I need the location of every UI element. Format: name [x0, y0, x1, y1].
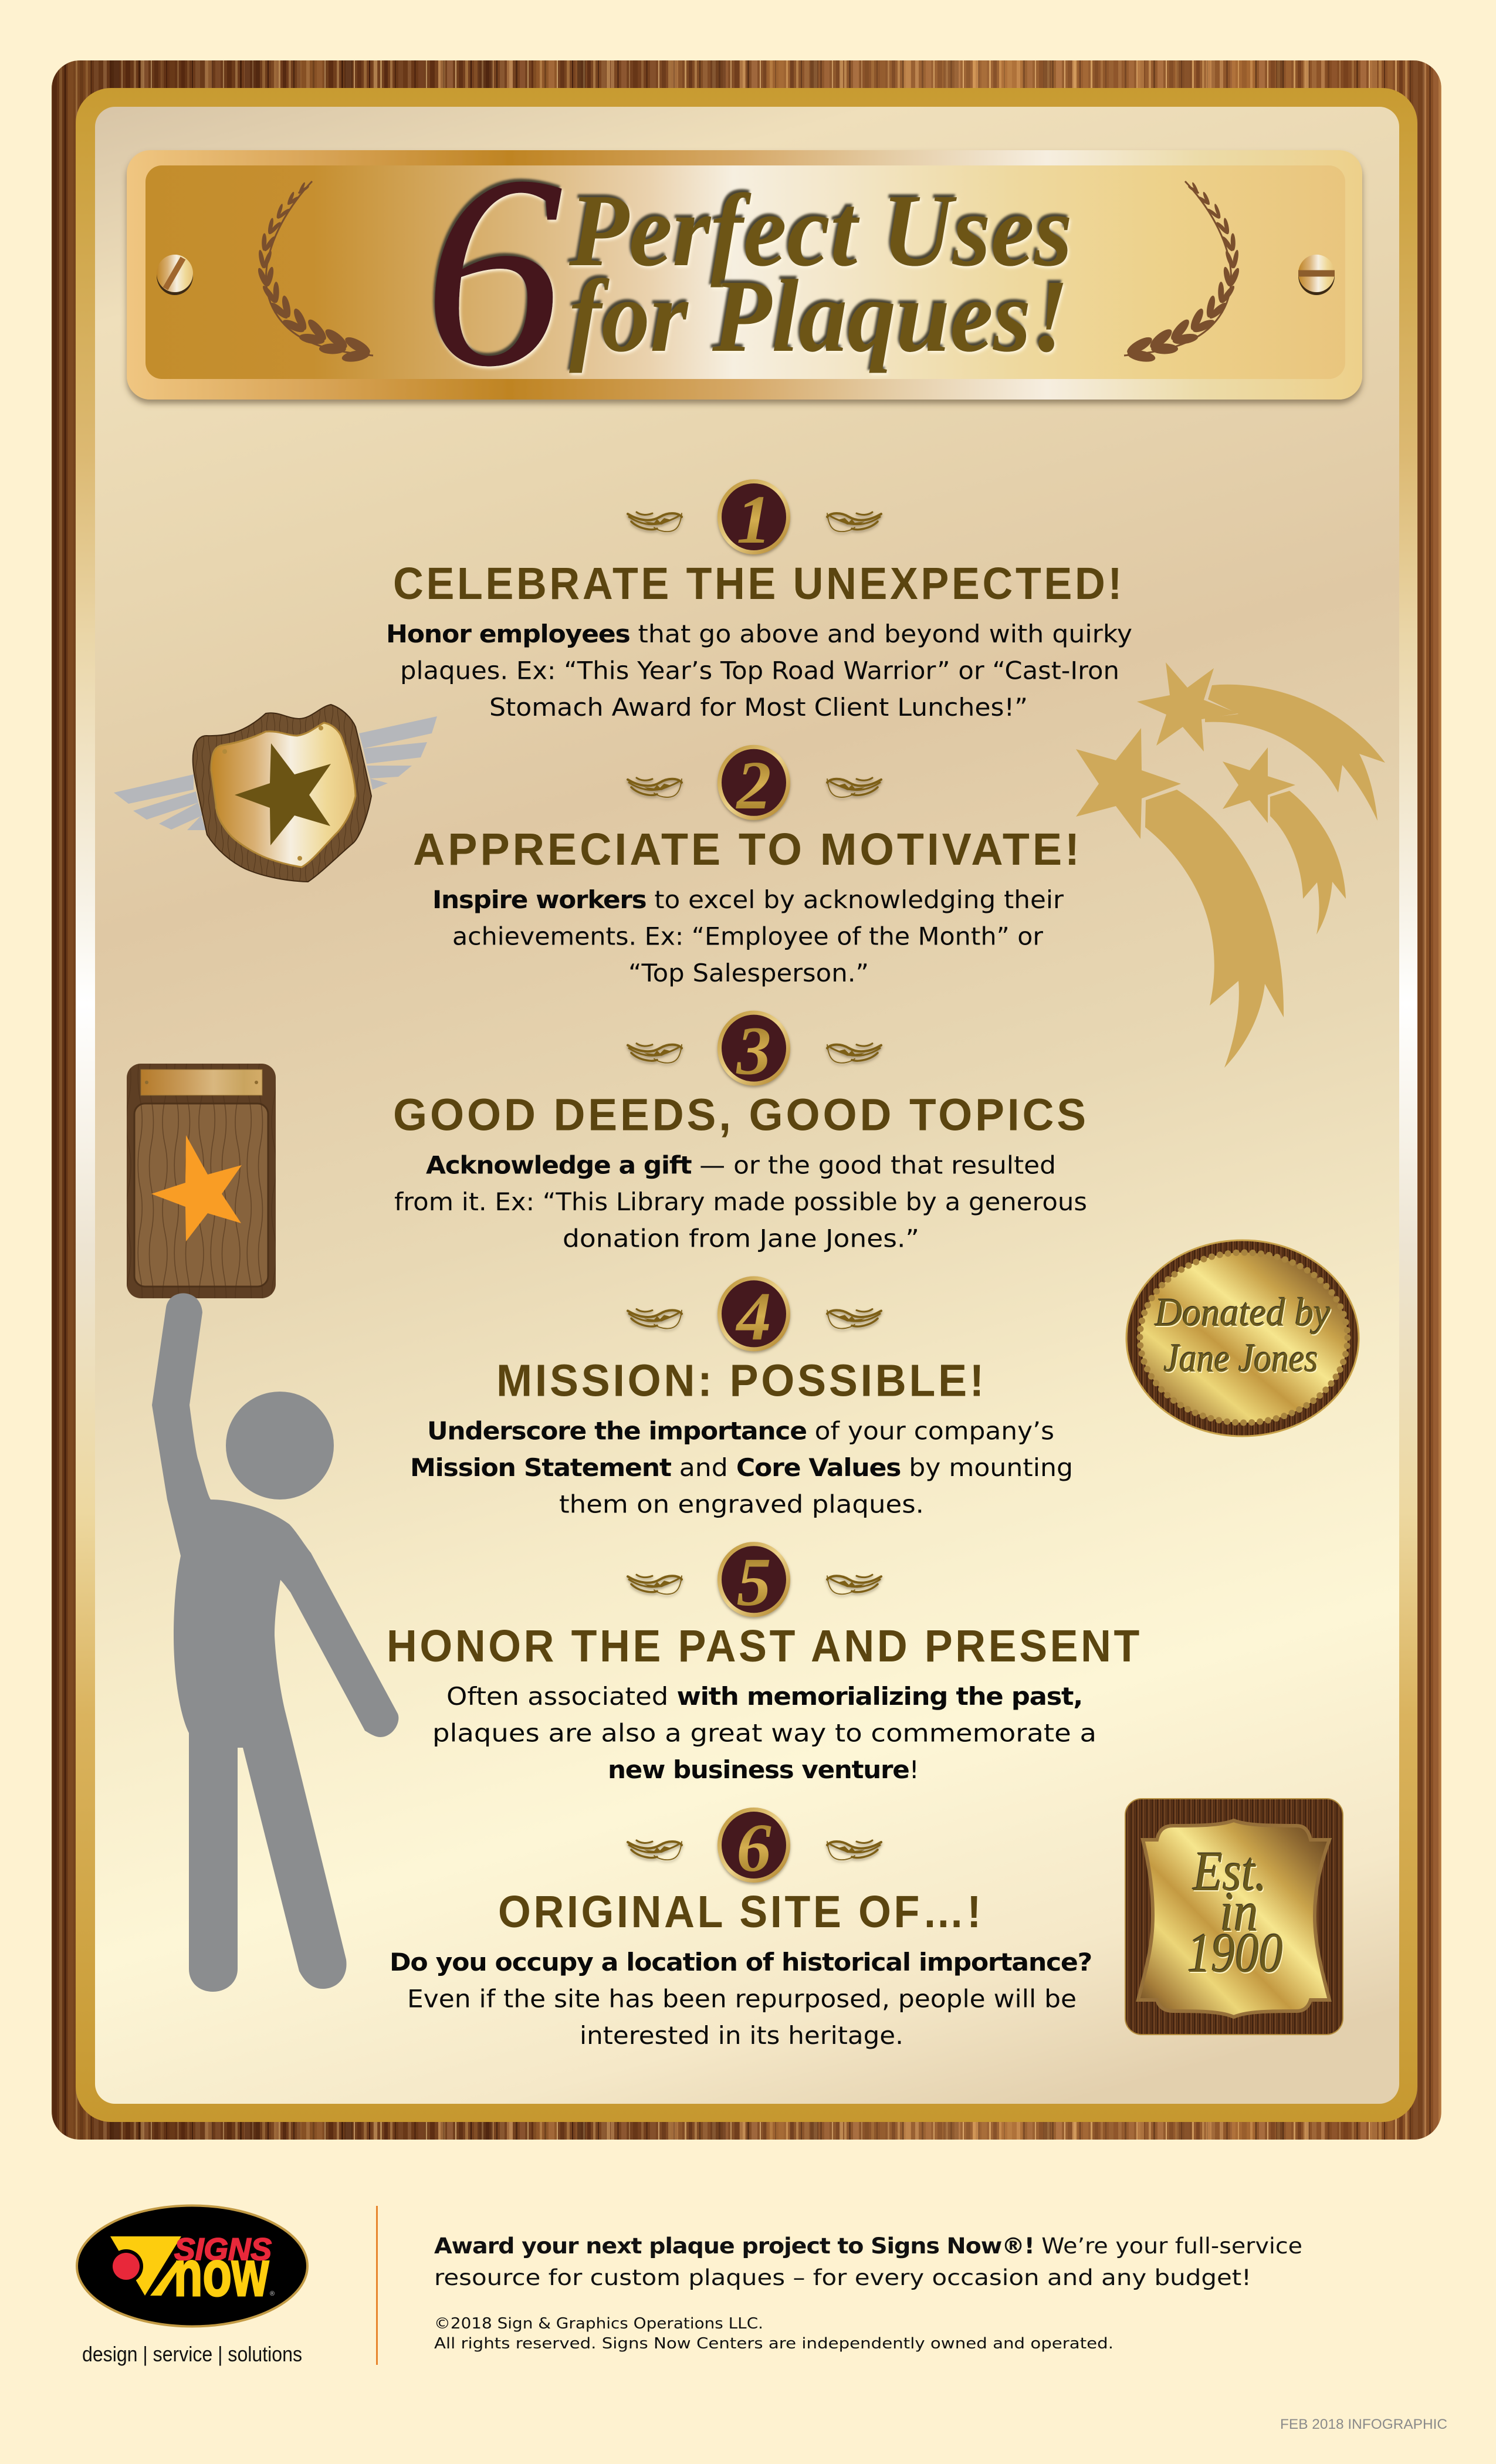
body 1: Honor employees that go above and beyond with quirky [386, 620, 1132, 648]
footer copyright [434, 2315, 1113, 2353]
plaque text: 1900: 1900 [1187, 1922, 1283, 1984]
number badge 2 [628, 745, 881, 824]
body 2 [432, 885, 1064, 987]
body 3: from it. Ex: “This Library made possible by a generous [394, 1187, 1087, 1216]
body 3: donation from Jane Jones.” [563, 1224, 919, 1253]
section 6 [390, 1808, 1092, 2050]
icon: shooting stars [1076, 662, 1385, 1068]
body 6: interested in its heritage. [580, 2021, 903, 2050]
number badge 6: 6 [737, 1809, 771, 1886]
heading 1: CELEBRATE THE UNEXPECTED! [393, 559, 1125, 609]
icon: wood plaque with orange star [127, 1064, 276, 1298]
body 2: achievements. Ex: “Employee of the Month” or [452, 922, 1044, 950]
Signs Now logo: ® [270, 2290, 275, 2297]
number badge 5: 5 [737, 1544, 771, 1620]
body 4: Mission Statement and Core Values by mounting [410, 1453, 1073, 1482]
body 2: “Top Salesperson.” [628, 959, 869, 987]
footer date note: FEB 2018 INFOGRAPHIC [1280, 2416, 1447, 2432]
plaque text: Est.: Est. [1192, 1840, 1267, 1903]
medallion text: Donated by [1155, 1290, 1331, 1335]
footer copyright: All rights reserved. Signs Now Centers are independently owned and operated. [434, 2335, 1113, 2353]
number badge 5 [628, 1542, 881, 1620]
footer copyright: ©2018 Sign & Graphics Operations LLC. [434, 2315, 763, 2333]
section 5 [387, 1542, 1142, 1784]
number badge 3 [628, 1011, 881, 1089]
body 5: new business venture ! [608, 1755, 919, 1784]
plaque board: wood, gold frame and panel [52, 60, 1441, 2140]
number badge 4 [628, 1276, 881, 1355]
icon: winged shield plaque [114, 705, 437, 882]
icon: donated by medallion [1126, 1240, 1359, 1436]
heading 4: MISSION: POSSIBLE! [496, 1355, 987, 1406]
body 6: Do you occupy a location of historical importance? [390, 1948, 1092, 1976]
body 1 [386, 620, 1132, 722]
body 6: Even if the site has been repurposed, people will be [407, 1984, 1077, 2013]
title: big six: 6 [424, 119, 563, 424]
body 3 [394, 1151, 1087, 1253]
title: first line: Perfect Uses [568, 173, 1072, 288]
medallion text line 2: Jane Jones [1164, 1336, 1318, 1380]
heading 6: ORIGINAL SITE OF…! [498, 1887, 984, 1937]
Signs Now logo: now [174, 2238, 269, 2310]
footer call to action: resource for custom plaques – for every occasion and any budget! [434, 2265, 1251, 2290]
icon: right screw [1298, 255, 1335, 295]
body 4: them on engraved plaques. [559, 1490, 924, 1518]
Signs Now logo: SIGNS [174, 2232, 272, 2267]
number badge 3: 3 [736, 1013, 771, 1089]
body 5: Often associated with memorializing the past, [446, 1682, 1082, 1711]
number badge 1: 1 [737, 481, 771, 558]
title: second line: for Plaques! [569, 259, 1069, 374]
footer divider [376, 2206, 378, 2365]
number badge 2: 2 [736, 747, 771, 824]
icon: right wheat wreath [1124, 181, 1241, 364]
heading 2: APPRECIATE TO MOTIVATE! [413, 824, 1082, 875]
body 1: plaques. Ex: “This Year’s Top Road Warrior” or “Cast-Iron [400, 656, 1119, 685]
body 3: Acknowledge a gift — or the good that resulted [426, 1151, 1056, 1180]
number badge 6 [628, 1808, 881, 1886]
section 2 [413, 745, 1082, 987]
footer call to action: Award your next plaque project to Signs Now®! We’re your full-service [434, 2233, 1302, 2259]
title plate [127, 119, 1362, 424]
Signs Now logo [77, 2206, 307, 2327]
heading 3: GOOD DEEDS, GOOD TOPICS [393, 1090, 1089, 1140]
body 1: Stomach Award for Most Client Lunches!” [489, 693, 1028, 722]
icon: grey person holding plaque [152, 1293, 398, 1992]
orange star [151, 1135, 242, 1241]
number badge 1 [628, 479, 881, 558]
nameplate [141, 1069, 262, 1095]
section 3 [393, 1011, 1089, 1253]
body 5: plaques are also a great way to commemorate a [432, 1719, 1096, 1748]
logo tagline: design | service | solutions [82, 2342, 302, 2366]
plaque text: in: in [1220, 1881, 1258, 1943]
section 1 [386, 479, 1132, 722]
body 6 [390, 1948, 1092, 2050]
icon: left wheat wreath [256, 181, 373, 364]
icon: left screw [157, 255, 193, 295]
body 2: Inspire workers to excel by acknowledging their [432, 885, 1064, 914]
heading 5: HONOR THE PAST AND PRESENT [387, 1621, 1142, 1671]
footer call to action [434, 2233, 1302, 2290]
body 4 [410, 1416, 1073, 1518]
icon: established plaque [1125, 1799, 1343, 2035]
number badge 4: 4 [736, 1278, 771, 1355]
section 4 [410, 1276, 1073, 1518]
body 5 [432, 1682, 1096, 1784]
body 4: Underscore the importance of your company’s [427, 1416, 1054, 1445]
